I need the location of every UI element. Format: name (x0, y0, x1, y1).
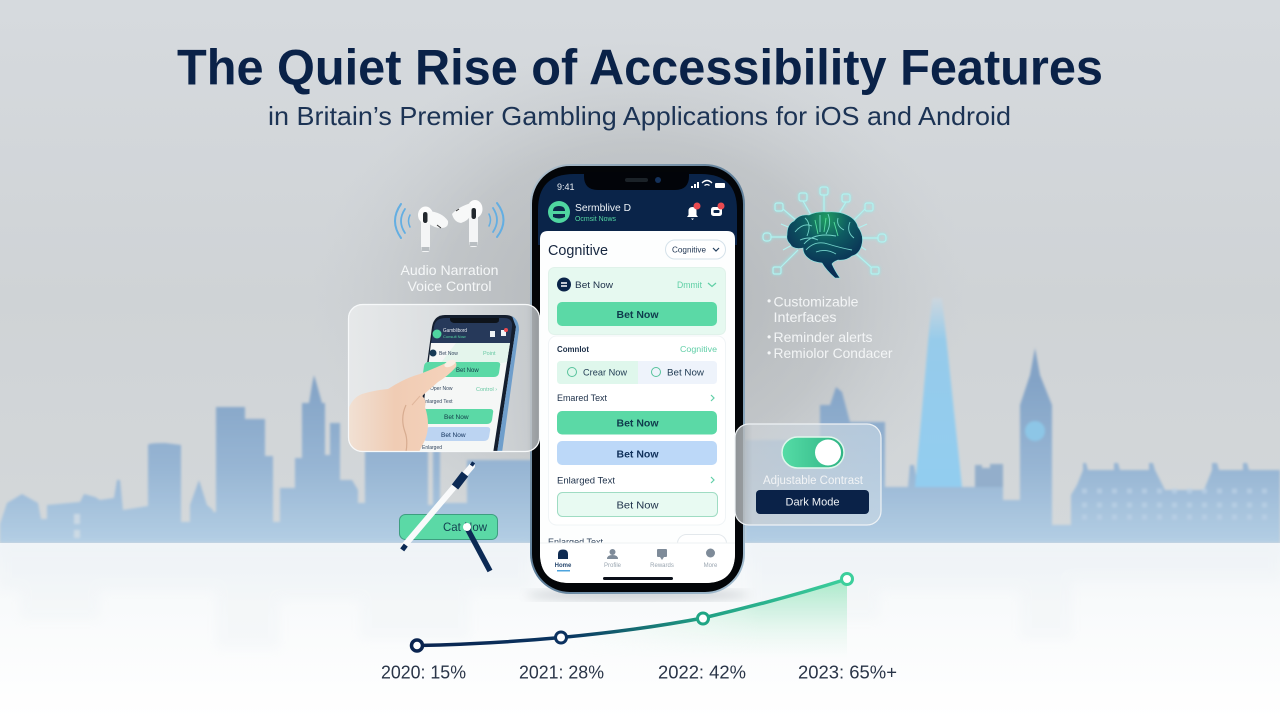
chart labels (381, 662, 897, 682)
row heading: enlarged text (557, 476, 714, 486)
status bar: 9:41 (557, 182, 575, 192)
background (0, 0, 1280, 560)
card: options list (548, 336, 726, 525)
text: cognitive feature bullets: Interfaces (774, 309, 836, 325)
text: audio narration label (400, 263, 498, 294)
status bar (557, 180, 725, 192)
small phone: Enlarged (422, 445, 442, 451)
dark mode button: Dark Mode (786, 496, 840, 508)
line chart: adoption growth (381, 574, 897, 682)
small phone (420, 315, 519, 451)
panel: main phone mockup (530, 164, 745, 594)
brain body (787, 212, 862, 278)
neural connections (763, 187, 886, 274)
text: cognitive feature bullets: Reminder alerts (774, 329, 872, 345)
small phone: Bet Now (439, 351, 458, 357)
ground reflection (0, 543, 1280, 720)
green button: Bet Now (616, 418, 659, 430)
card: bet now: Bet Now (575, 280, 613, 291)
small phone: Control › (476, 387, 497, 393)
panel: adjustable contrast card (735, 424, 881, 525)
left sound waves (395, 204, 410, 238)
outline button (558, 492, 718, 516)
small phone: Point (483, 351, 496, 357)
row heading: compliant: Comnlot (557, 344, 589, 354)
partially hidden row: Enlarged Text (548, 537, 603, 548)
text: audio narration label: Audio Narration (400, 263, 498, 278)
left earbud (418, 206, 448, 252)
card: bet now (548, 268, 726, 334)
screen heading: Cognitive (548, 243, 608, 259)
icon: brain with neural nodes (763, 187, 886, 278)
card: bet now: Bet Now (616, 309, 659, 321)
segmented control (557, 361, 717, 384)
brain circuit lines (795, 214, 854, 254)
text: cognitive feature bullets: Customizable (774, 294, 859, 310)
green button (557, 411, 717, 434)
contrast label: Adjustable Contrast (763, 475, 864, 487)
chart labels: 2022: 42% (658, 662, 746, 682)
small phone: Enlarged Text (422, 399, 453, 405)
text: cognitive feature bullets: • (767, 294, 771, 308)
bottom navigation: Profile (604, 563, 622, 569)
card: bet now: Dmmit (677, 280, 702, 291)
text: audio narration label: Voice Control (408, 279, 492, 294)
text: cognitive feature bullets: Remiolor Condacer (774, 345, 893, 361)
text: cognitive feature bullets (767, 294, 893, 361)
small phone: Consult Now (443, 334, 466, 339)
blue button: Bet Now (616, 448, 659, 460)
title: The Quiet Rise of Accessibility Features (177, 40, 1103, 96)
subtitle: in Britain’s Premier Gambling Applications for iOS and Android (268, 101, 1011, 131)
app header: Sermblive D (575, 202, 631, 214)
small phone: Bet Now (444, 414, 469, 421)
row heading: enlarged text: Enlarged Text (557, 476, 615, 486)
partially hidden row (548, 534, 726, 552)
segmented control: Bet Now (667, 368, 704, 378)
button: cat now: Cat Now (443, 520, 487, 534)
dark mode button (756, 490, 869, 514)
app header: Ocmsit Nows (575, 214, 616, 223)
row heading: enlarged text: Emared Text (557, 393, 607, 404)
neural connections glow (763, 187, 886, 274)
text: cognitive feature bullets: • (767, 330, 771, 344)
chart labels: 2021: 28% (519, 662, 604, 682)
bottom navigation: Rewards (650, 563, 674, 569)
outline button: Bet Now (616, 500, 659, 512)
notch (584, 172, 689, 190)
small phone: Bet Now (441, 432, 466, 439)
icon: earbuds with sound waves (395, 200, 504, 252)
hand (348, 361, 456, 452)
phone frame (530, 164, 745, 594)
right sound waves (489, 203, 504, 237)
small phone: Bet Now (456, 368, 479, 374)
panel: touch interaction card (348, 304, 540, 460)
small phone: Oper Now (430, 386, 453, 392)
bottom navigation: More (704, 563, 718, 569)
app header (548, 201, 724, 223)
text: cognitive feature bullets: • (767, 346, 771, 360)
phone shadow (526, 590, 750, 600)
toggle switch (782, 437, 844, 468)
blue button (557, 441, 717, 465)
row heading: compliant: Cognitive (680, 344, 717, 354)
button: cat now (400, 514, 498, 540)
bottom navigation (540, 543, 735, 583)
dropdown pill: Cognitive (672, 246, 707, 254)
small phone: Gamblibord (443, 328, 467, 334)
segmented control: Crear Now (583, 368, 627, 378)
bottom navigation: Home (555, 563, 572, 569)
chart labels: 2020: 15% (381, 662, 466, 682)
row heading: compliant (557, 344, 717, 354)
london skyline silhouette (0, 298, 1280, 543)
icon: stylus white (402, 463, 474, 549)
row heading: enlarged text (557, 393, 714, 404)
white app screen (540, 231, 735, 583)
right earbud (452, 200, 482, 247)
phone header area (538, 174, 737, 245)
chart labels: 2023: 65%+ (798, 662, 897, 682)
icon: stylus navy (463, 523, 490, 571)
dropdown pill (666, 240, 726, 259)
